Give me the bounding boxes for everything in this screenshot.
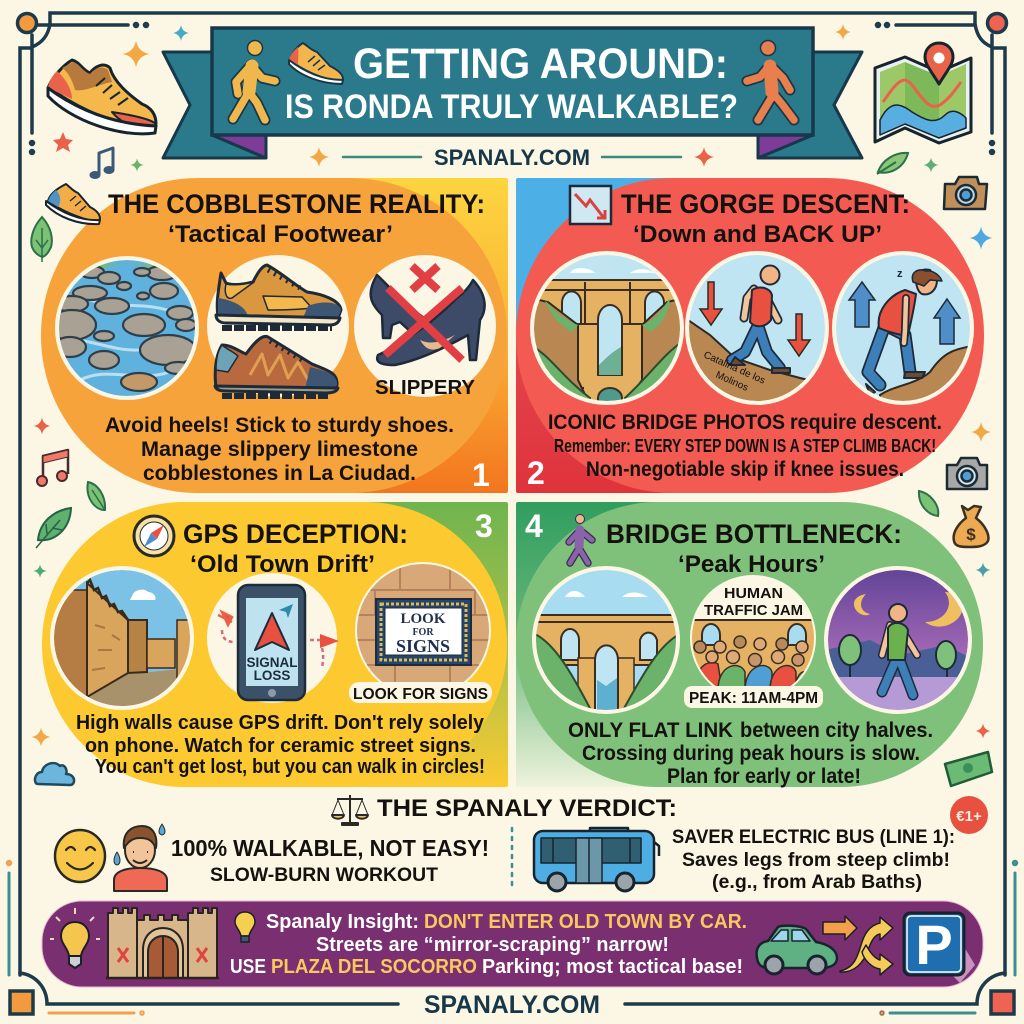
panel body text: ICONIC BRIDGE PHOTOS — [548, 411, 785, 434]
caption: PEAK: 11AM-4PM — [689, 690, 818, 707]
panel body text — [568, 719, 933, 788]
icon: small sneaker left — [46, 184, 100, 224]
illustration: ceramic street sign — [349, 560, 495, 703]
panel background corner — [516, 502, 724, 787]
icon: orange walker — [747, 40, 794, 120]
label: signal loss: SIGNAL — [246, 655, 298, 670]
icon: music note navy — [90, 148, 114, 178]
panel subheading: ‘Peak Hours’ — [678, 551, 825, 578]
icon: electric bus — [534, 828, 659, 891]
icon: green car — [757, 926, 837, 974]
panel body text: Manage slippery limestone — [141, 438, 418, 461]
verdict right text: (e.g., from Arab Baths) — [712, 871, 922, 893]
icon: leaf left top — [31, 217, 52, 262]
icon: route arrows — [823, 916, 893, 975]
icon: sweating person — [114, 824, 167, 891]
illustration: crossed out heels — [354, 255, 496, 399]
icon: parking sign: P — [915, 913, 953, 976]
subtitle site name: SPANALY.COM — [434, 145, 590, 170]
panel blob — [42, 502, 507, 787]
ribbon left tail — [163, 52, 266, 158]
illustration: climbing back up — [830, 250, 980, 410]
icon: light bulb — [50, 908, 100, 968]
panel body text: You can't get lost, but you can walk in circles! — [95, 755, 485, 778]
sign text: SIGNS — [396, 636, 450, 656]
icon: descending chart — [570, 186, 611, 224]
banner background — [42, 901, 983, 987]
panel subheading: ‘Old Town Drift’ — [190, 551, 375, 578]
insight line 1 highlight: DON'T ENTER OLD TOWN BY CAR. — [424, 911, 747, 933]
caption pill — [349, 682, 492, 703]
panel subheading: ‘Down and BACK UP’ — [633, 221, 882, 248]
title line 1: GETTING AROUND: — [353, 40, 728, 88]
ribbon right fold — [758, 135, 813, 158]
panel 4: bridge bottleneck — [516, 502, 983, 788]
icon: leaf left mid — [87, 482, 105, 510]
illustration: high walls — [50, 565, 200, 715]
footer site name: SPANALY.COM — [424, 991, 600, 1019]
insight line 3 end: Parking; most tactical base! — [482, 956, 743, 978]
panel body text: ONLY FLAT LINK — [568, 719, 733, 742]
illustration: cobblestones in water — [48, 255, 200, 400]
panel heading: THE GORGE DESCENT: — [621, 189, 910, 219]
illustration: night walk — [825, 565, 975, 717]
icon: cloud — [35, 763, 74, 785]
panel body text: between city halves. — [740, 719, 933, 742]
label: slippery: SLIPPERY — [375, 377, 476, 399]
panel subheading: ‘Tactical Footwear’ — [168, 221, 393, 248]
panel number: 4 — [525, 508, 543, 544]
ribbon left fold — [212, 135, 266, 158]
panel 1: cobblestone reality — [41, 178, 508, 493]
icon: money bag: $ — [966, 525, 976, 544]
icon: castle gate — [106, 908, 219, 978]
label: traffic jam: TRAFFIC JAM — [704, 602, 803, 619]
verdict right text: SAVER ELECTRIC BUS (LINE 1): — [672, 826, 955, 848]
insight line 3 start: USE — [230, 956, 266, 978]
price badge: €1+ — [956, 808, 982, 825]
panel background corner — [300, 178, 508, 493]
panel heading: THE COBBLESTONE REALITY: — [108, 189, 485, 219]
panel body text: on phone. Watch for ceramic street signs. — [85, 734, 476, 757]
illustration: phone signal loss — [207, 573, 339, 703]
panel blob — [516, 178, 984, 493]
panel background corner — [516, 178, 724, 493]
icon: leaf right top — [877, 153, 908, 174]
sign text: LOOK — [400, 611, 446, 627]
illustration: walking down — [685, 251, 829, 405]
caption pill — [684, 686, 823, 708]
caption: LOOK FOR SIGNS — [353, 686, 488, 703]
icon: leaf right mid — [919, 491, 938, 516]
title line 2: IS RONDA TRULY WALKABLE? — [285, 88, 738, 126]
insight line 3 highlight: PLAZA DEL SOCORRO — [271, 956, 477, 978]
icon: smiley — [55, 830, 105, 882]
label: trail name: Catalina de los — [702, 350, 767, 387]
panel 2: gorge descent — [516, 178, 984, 493]
panel body text: Plan for early or late! — [667, 765, 861, 788]
verdict heading: THE SPANALY VERDICT: — [377, 795, 677, 822]
icon: small bulb — [235, 912, 255, 942]
icon: brown camera — [944, 177, 987, 209]
illustration: hiking shoes — [207, 255, 349, 397]
panel body text: cobblestones in La Ciudad. — [143, 462, 416, 485]
label: trail name line 2: Molinos — [714, 370, 750, 394]
ribbon right tail — [758, 52, 862, 158]
panel number: 3 — [475, 508, 493, 544]
icon: banner shoe — [289, 43, 343, 84]
panel number: 2 — [527, 455, 545, 491]
panel heading: BRIDGE BOTTLENECK: — [606, 519, 902, 549]
title banner — [163, 28, 862, 158]
insight line 2: Streets are “mirror-scraping” narrow! — [316, 934, 669, 956]
panel background corner — [300, 502, 508, 787]
icon: purple walker — [569, 514, 592, 563]
insight banner — [42, 901, 983, 987]
label: loss: LOSS — [254, 668, 290, 683]
icon: yellow walker — [233, 40, 275, 120]
panel body text: require descent. — [790, 411, 942, 434]
icon: scales of justice — [332, 795, 368, 825]
insight line 1 label: Spanaly Insight: — [266, 911, 419, 933]
illustration: Puente Nuevo bridge — [530, 250, 685, 410]
label: zzz: z — [897, 268, 903, 280]
illustration: bridge by day — [530, 565, 685, 718]
panel body text: High walls cause GPS drift. Don't rely solely — [76, 711, 485, 734]
icon: music note red — [37, 450, 68, 486]
icon: banknote — [945, 752, 992, 786]
sparkles — [32, 24, 992, 778]
panel body text: Avoid heels! Stick to sturdy shoes. — [105, 414, 454, 437]
verdict right text — [672, 826, 955, 893]
verdict section — [55, 795, 988, 893]
verdict left subline: SLOW-BURN WORKOUT — [210, 865, 438, 886]
icon: grey camera — [947, 458, 987, 489]
price badge — [950, 796, 988, 834]
icon: money bag — [954, 506, 988, 547]
sign text: FOR — [412, 627, 434, 638]
panel number: 1 — [472, 457, 490, 493]
panel body text — [548, 411, 942, 481]
dotted divider — [511, 828, 513, 890]
panel body text: Non-negotiable skip if knee issues. — [586, 458, 904, 481]
banner body — [212, 28, 813, 135]
icon: large sneaker — [48, 60, 156, 134]
panel blob — [516, 502, 983, 787]
panel body text — [105, 414, 454, 485]
icon: parking sign — [904, 913, 964, 976]
panel 3: GPS deception — [42, 502, 508, 787]
label: human: HUMAN — [724, 585, 783, 602]
illustration: human traffic jam — [684, 575, 823, 708]
decorative corner — [932, 945, 975, 983]
panel body text: Crossing during peak hours is slow. — [582, 742, 920, 765]
panel body text — [76, 711, 485, 778]
icon: leaf left lower — [36, 508, 71, 548]
verdict right text: Saves legs from steep climb! — [682, 849, 950, 871]
icon: compass — [134, 516, 174, 556]
panel heading: GPS DECEPTION: — [183, 519, 408, 549]
verdict left headline: 100% WALKABLE, NOT EASY! — [171, 835, 489, 861]
panel blob — [41, 178, 507, 493]
icon: map with pin — [875, 43, 971, 143]
icon: red star — [53, 132, 73, 152]
